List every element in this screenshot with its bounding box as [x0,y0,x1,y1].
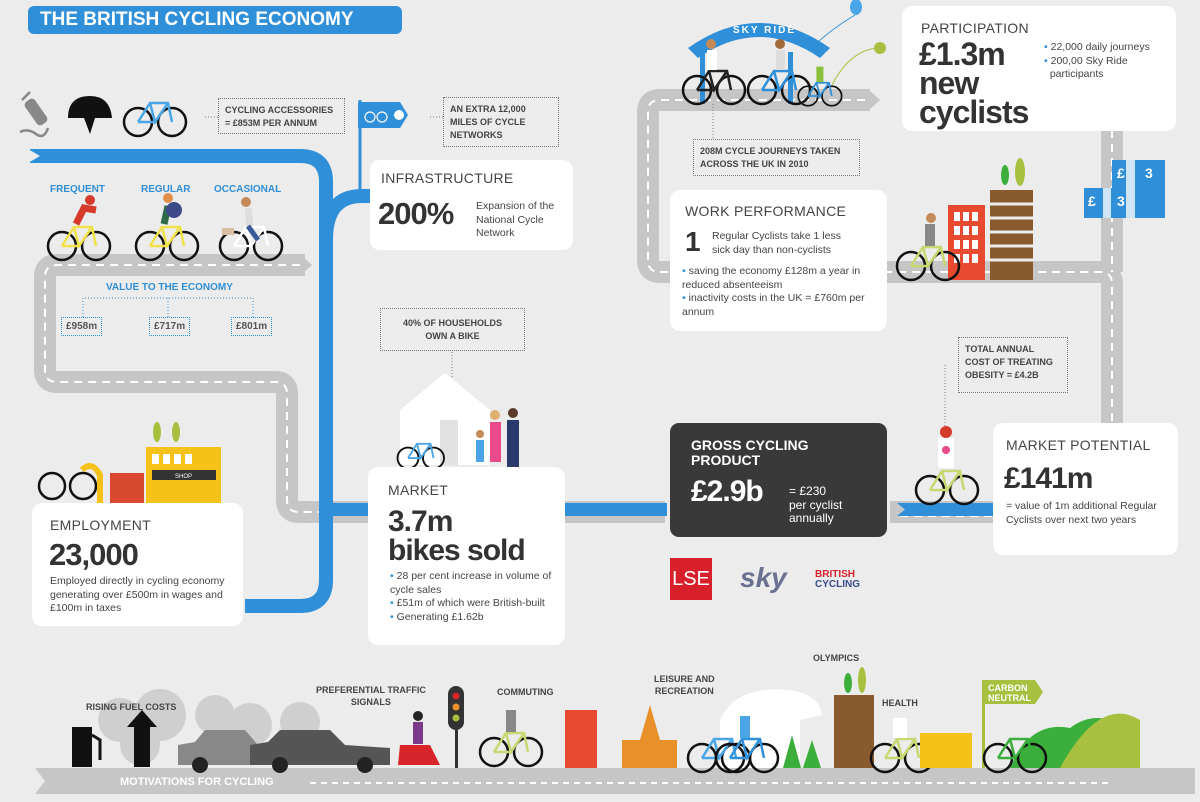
panel: work performance: sick day than non-cyclists [712,244,831,256]
icon: three cyclist types [48,193,282,260]
callout: households [380,308,525,351]
road: blue cycle route [28,100,995,606]
callout: journeys [693,139,860,176]
callout: households: OWN A BIKE [425,331,480,341]
callout: extra miles: MILES OF CYCLE [450,117,526,127]
panel: market potential: = value of 1m additional Regular Cyclists over next two years [1006,500,1157,526]
panel: participation: cyclists [919,94,1028,130]
panel: gross cycling product: per cyclist [789,498,842,512]
icon: sky ride arch: SKY RIDE [733,25,796,36]
panel: participation: • 22,000 daily journeys [1044,41,1150,53]
text: MOTIVATIONS FOR CYCLING [120,776,274,788]
panel: participation: £1.3m [919,36,1005,72]
panel: participation: new [919,65,978,101]
value to the economy: VALUE TO THE ECONOMY [106,282,233,293]
panel: work performance: • inactivity costs in the UK = £760m per annum [682,292,865,318]
callout: journeys: 208M CYCLE JOURNEYS TAKEN [700,146,840,156]
panel: market: • 28 per cent increase in volume of cycle sales [390,570,551,596]
text: PREFERENTIAL TRAFFIC [316,685,426,695]
panel: market: bikes sold [388,534,525,567]
icon: route sign flag [358,102,408,128]
panel: market potential [993,423,1178,555]
panel: market: 3.7m [388,505,452,538]
panel: infrastructure [370,160,573,250]
title: THE BRITISH CYCLING ECONOMY [40,9,354,30]
panel: work performance: • saving the economy £128m a year in reduced absenteeism [682,265,860,290]
panel: participation: participants [1050,68,1104,80]
text: £958m [66,321,97,332]
panel: gross cycling product [670,423,887,537]
bottom road [35,768,1195,794]
callout: obesity: OBESITY = £4.2B [965,370,1039,380]
icon: pump, helmet, bike [20,92,186,136]
panel: employment: 23,000 [49,537,138,572]
bottom labels: RISING FUEL COSTS [86,702,176,712]
callout: households: 40% OF HOUSEHOLDS [403,318,502,328]
panel: infrastructure: INFRASTRUCTURE [381,170,514,186]
panel: market potential: £141m [1004,462,1092,495]
panel: market [368,467,565,645]
callout: extra miles: NETWORKS [450,130,502,140]
panel: market potential: MARKET POTENTIAL [1006,437,1151,453]
callout: obesity: COST OF TREATING [965,357,1053,367]
panel: market: MARKET [388,482,448,498]
panel: gross cycling product: annually [789,511,834,525]
icon: healthy cyclist [916,426,978,504]
panel: gross cycling product: GROSS CYCLING [691,437,808,453]
panel: work performance: 1 [685,226,700,257]
logos: BRITISH [815,569,855,580]
icon: house and family [398,373,519,468]
panel: gross cycling product: £2.9b [691,475,763,508]
text: OCCASIONAL [214,184,281,195]
panel: gross cycling product: PRODUCT [691,452,760,468]
panel: work performance [670,190,887,331]
panel: market: • Generating £1.62b [390,610,484,622]
text: RECREATION [655,686,714,696]
panel: work performance: WORK PERFORMANCE [685,203,846,219]
logos: CYCLING [815,579,860,590]
text: OLYMPICS [813,653,859,663]
icon: city buildings [897,158,1033,280]
panel: infrastructure: 200% [378,196,453,231]
callout: accessories: CYCLING ACCESSORIES [225,105,333,115]
icon: pound blocks: 3 [1117,193,1125,209]
callout: obesity: TOTAL ANNUAL [965,344,1034,354]
text: NEUTRAL [988,693,1031,703]
road: top right grey [648,89,1112,516]
text: £717m [154,321,185,332]
text: CARBON [988,683,1028,693]
text: £801m [236,321,267,332]
title [28,6,402,34]
text: COMMUTING [497,687,554,697]
panel: employment: Employed directly in cycling economy generating over £500m in wages and £100m in taxes [50,575,224,614]
logos: LSE [672,568,710,590]
icon: shop: SHOP [175,474,192,480]
icon: pound blocks [1084,160,1165,218]
panel: participation [902,6,1176,131]
callout: extra miles [443,97,559,147]
panel: employment: EMPLOYMENT [50,517,151,533]
panel: market: • £51m of which were British-built [390,597,545,609]
panel: work performance: Regular Cyclists take 1 less [712,230,841,242]
icon: pound blocks: £ [1088,193,1096,209]
callout: accessories: = £853M PER ANNUM [225,118,317,128]
icon: sky ride arch [683,0,886,106]
logos: sky [740,562,787,593]
text: REGULAR [141,184,190,195]
panel: participation: PARTICIPATION [921,20,1029,36]
panel: participation: • 200,00 Sky Ride [1044,54,1128,66]
callout: extra miles: AN EXTRA 12,000 [450,104,526,114]
panel: employment [32,503,243,626]
logos [670,558,860,600]
text: LEISURE AND [654,674,715,684]
text: SIGNALS [351,697,391,707]
panel: infrastructure: Expansion of the National Cycle Network [476,200,554,239]
callout: obesity [958,337,1068,393]
road: middle left grey [45,254,665,512]
icon: pound blocks: 3 [1145,165,1153,181]
icon: pound blocks: £ [1117,165,1125,181]
icon: shop [39,422,221,507]
cyclist type labels: FREQUENT [50,184,105,195]
value connectors [83,298,253,317]
text: HEALTH [882,698,918,708]
bottom scene [72,667,1140,773]
callout: journeys: ACROSS THE UK IN 2010 [700,159,809,169]
connectors dotted [205,104,945,428]
callout: accessories [218,98,345,134]
panel: gross cycling product: = £230 [789,484,826,498]
